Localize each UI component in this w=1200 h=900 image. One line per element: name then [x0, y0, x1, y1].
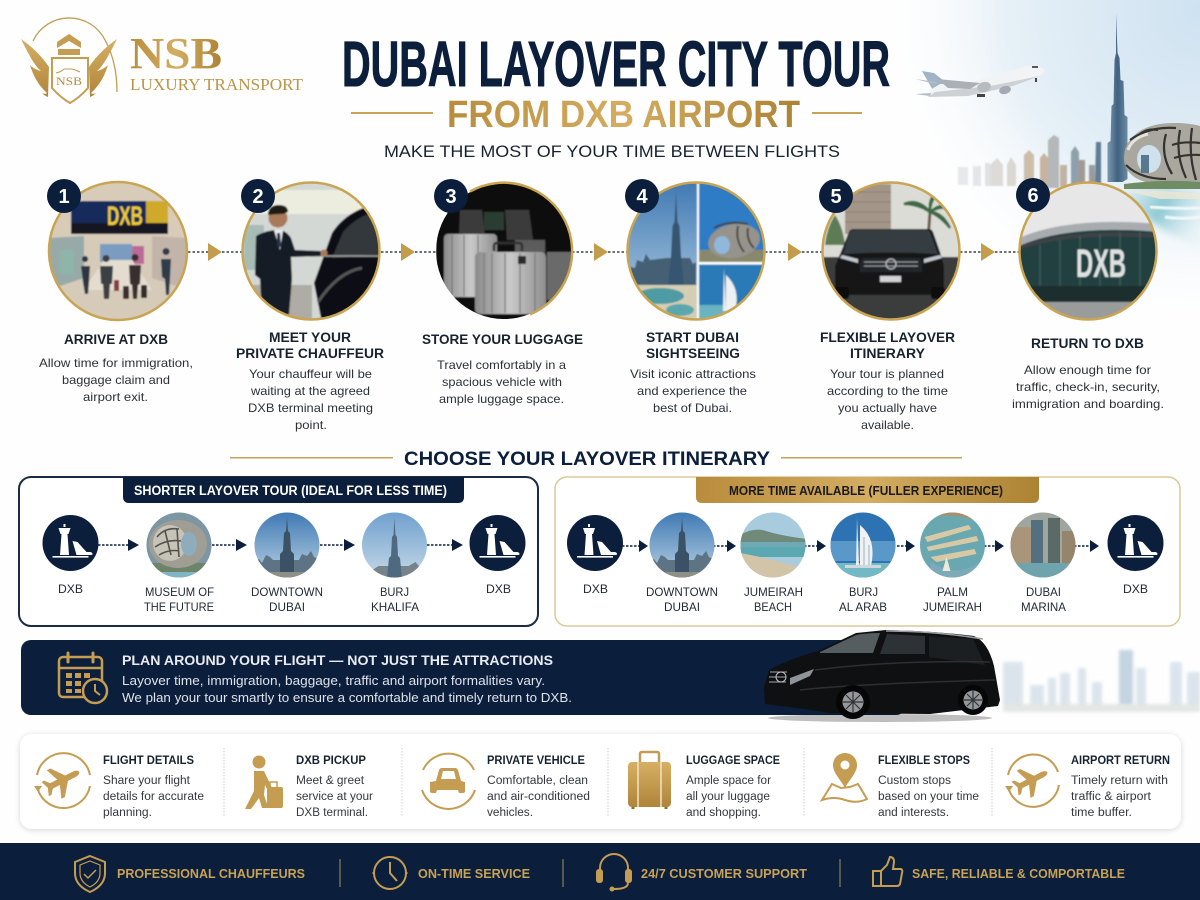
number badge 4: 4 [636, 186, 648, 208]
panel: more time available [555, 477, 1180, 626]
icon: map pin on map [822, 753, 867, 802]
footer item: professional chauffeurs [75, 856, 305, 892]
number badge 2: 2 [252, 186, 264, 208]
step 3 text: spacious vehicle with [442, 375, 562, 389]
photo: airport arrivals hall: DXB [107, 201, 143, 231]
step 2 text: Your chauffeur will be [249, 367, 372, 381]
stop: Jumeirah Beach: BEACH [754, 600, 792, 614]
stop: Burj Al Arab [830, 512, 896, 614]
feature: flexible stops: Custom stops [878, 775, 951, 787]
icon: calendar with clock [59, 653, 107, 703]
step 3 text [422, 332, 583, 406]
number badge 5 [819, 179, 853, 213]
tab: shorter layover heading [123, 477, 464, 503]
step 1 text: Allow time for immigration, [39, 356, 193, 370]
feature: private vehicle: PRIVATE VEHICLE [487, 753, 585, 767]
step 4 text: Visit iconic attractions [630, 367, 756, 381]
stop: Museum of the Future: THE FUTURE [144, 600, 214, 614]
banner text [122, 674, 572, 705]
step 3 text: STORE YOUR LUGGAGE [422, 332, 583, 347]
logo wordmark: NSB [130, 29, 222, 78]
stop: Downtown Dubai [646, 512, 718, 614]
step 2 text: PRIVATE CHAUFFEUR [236, 346, 384, 361]
step 1 text [39, 332, 193, 404]
step connectors [188, 243, 1019, 261]
stop: Burj Al Arab: AL ARAB [839, 600, 887, 614]
logo crest: NSB [56, 74, 82, 88]
banner text: Layover time, immigration, baggage, traffic and airport formalities vary. [122, 674, 545, 688]
icon: headset [596, 854, 632, 892]
feature: DXB pickup [245, 753, 373, 819]
step 2 text: DXB terminal meeting [248, 401, 373, 415]
photo: chauffeur opening car door [242, 181, 382, 323]
stop: DXB [567, 515, 623, 596]
number badge 6 [1016, 178, 1050, 212]
step 4 text: START DUBAI [646, 330, 739, 345]
feature: flight details: details for accurate [103, 791, 204, 803]
banner heading: PLAN AROUND YOUR FLIGHT — NOT JUST THE ATTRACTIONS [122, 653, 553, 668]
stop: Dubai Marina: DUBAI [1026, 585, 1061, 599]
title [342, 28, 890, 136]
icon: plane in ring [34, 753, 90, 808]
stop: DXB return: DXB [486, 582, 511, 596]
number badge 6: 6 [1027, 185, 1039, 207]
feature: flight details [34, 753, 204, 819]
icon: plane with return ring [1005, 754, 1059, 807]
photo: DXB terminal building [1019, 181, 1159, 322]
step 6 text: traffic, check-in, security, [1016, 380, 1160, 394]
icon: porter with suitcase [245, 756, 283, 809]
tab: fuller experience heading [696, 477, 1039, 503]
feature: luggage space [628, 752, 780, 819]
stop: Palm Jumeirah: JUMEIRAH [923, 600, 982, 614]
feature card row [20, 734, 1181, 829]
number badge 3: 3 [445, 186, 457, 208]
feature: flexible stops: and interests. [878, 807, 949, 819]
hero scenery: sky, skyline, Burj Khalifa, Museum of the Future [870, 0, 1200, 330]
stop: Dubai Marina [1010, 512, 1076, 614]
tab: fuller experience heading: MORE TIME AVAILABLE (FULLER EXPERIENCE) [729, 484, 1003, 498]
stop: Burj Khalifa: KHALIFA [371, 600, 419, 614]
stop: Downtown Dubai: DOWNTOWN [251, 585, 323, 599]
stop: Dubai Marina: MARINA [1021, 600, 1066, 614]
stop: Burj Al Arab: BURJ [849, 585, 878, 599]
icon: shield [75, 856, 105, 892]
number badge 4 [625, 179, 659, 213]
step 2 text: point. [295, 418, 327, 432]
step 2 text: waiting at the agreed [250, 384, 370, 398]
feature: airport return: time buffer. [1071, 807, 1132, 819]
step 5: flexible layover itinerary [819, 179, 962, 432]
feature: flexible stops [822, 753, 979, 819]
logo crest [21, 18, 117, 103]
icon: suitcase [628, 752, 671, 809]
photo: Dubai attractions collage [627, 181, 765, 321]
feature: DXB pickup: service at your [296, 791, 373, 803]
subtitle: MAKE THE MOST OF YOUR TIME BETWEEN FLIGHTS [384, 143, 840, 161]
tab: shorter layover heading: SHORTER LAYOVER TOUR (IDEAL FOR LESS TIME) [134, 483, 447, 498]
stop: Burj Khalifa [362, 512, 428, 614]
stop: Downtown Dubai: DUBAI [664, 600, 700, 614]
stop: DXB return [1108, 515, 1164, 596]
step 5 text: ITINERARY [850, 346, 925, 361]
feature: private vehicle: Comfortable, clean [487, 775, 588, 787]
feature: private vehicle: vehicles. [487, 807, 533, 819]
number badge 2 [241, 179, 275, 213]
feature: flexible stops: FLEXIBLE STOPS [878, 753, 970, 767]
stop: DXB: DXB [583, 582, 608, 596]
step 4 text: best of Dubai. [653, 401, 732, 415]
feature: airport return [1005, 753, 1170, 819]
title: FROM DXB AIRPORT [447, 94, 800, 136]
stop: DXB return [470, 515, 526, 596]
feature: airport return: AIRPORT RETURN [1071, 753, 1170, 767]
pale city skyline [1003, 650, 1200, 712]
footer item: professional chauffeurs: PROFESSIONAL CHAUFFEURS [117, 867, 305, 881]
title: DUBAI LAYOVER CITY TOUR [342, 28, 890, 100]
section heading: choose your layover itinerary: CHOOSE YOUR LAYOVER ITINERARY [404, 449, 770, 470]
step 3 text: ample luggage space. [439, 392, 564, 406]
feature: airport return: Timely return with [1071, 775, 1168, 787]
footer item: customer support: 24/7 CUSTOMER SUPPORT [641, 867, 807, 881]
feature: airport return: traffic & airport [1071, 791, 1152, 803]
stop: Museum of the Future [144, 512, 214, 614]
feature: private vehicle: and air-conditioned [487, 791, 590, 803]
step 1 text: ARRIVE AT DXB [64, 332, 168, 347]
banner text: We plan your tour smartly to ensure a comfortable and timely return to DXB. [122, 691, 572, 705]
stop: Palm Jumeirah [920, 512, 986, 614]
step 4 text [630, 330, 756, 415]
step 4: start Dubai sightseeing [625, 179, 765, 415]
feature: private vehicle [422, 753, 590, 819]
number badge 3 [434, 179, 468, 213]
step 5 text: Your tour is planned [830, 367, 944, 381]
feature: flight details: Share your flight [103, 775, 191, 787]
step 5 text: you actually have [838, 401, 937, 415]
step 5 text: available. [861, 418, 914, 432]
stop: DXB [42, 515, 98, 596]
step 5 text [820, 330, 955, 432]
black luxury van [764, 630, 1000, 722]
stop: Museum of the Future: MUSEUM OF [145, 585, 214, 599]
footer item: on-time service: ON-TIME SERVICE [418, 867, 530, 881]
step 2 text: MEET YOUR [269, 330, 351, 345]
step 6 text [1012, 336, 1164, 411]
stop: Jumeirah Beach: JUMEIRAH [744, 585, 803, 599]
stop: Downtown Dubai: DUBAI [269, 600, 305, 614]
step 6 text: immigration and boarding. [1012, 397, 1164, 411]
footer item: safe, reliable and comfortable: SAFE, RELIABLE & COMPORTABLE [912, 867, 1125, 881]
step 3: store your luggage [422, 179, 583, 406]
feature: DXB pickup: Meet & greet [296, 775, 365, 787]
step 3 text: Travel comfortably in a [437, 358, 566, 372]
feature: luggage space: and shopping. [686, 807, 761, 819]
stop: Palm Jumeirah: PALM [937, 585, 968, 599]
number badge 1: 1 [58, 186, 70, 208]
step 1 text: airport exit. [83, 390, 148, 404]
step 6 text: Allow enough time for [1024, 363, 1151, 377]
step 1: arrive at DXB [39, 179, 193, 404]
step 4 text: SIGHTSEEING [646, 346, 740, 361]
footer item: on-time service [372, 857, 530, 889]
photo: black SUV on Dubai street [822, 181, 962, 322]
Burj Khalifa [1108, 13, 1128, 182]
stop: DXB: DXB [58, 582, 83, 596]
footer item: customer support [596, 854, 807, 892]
feature: DXB pickup: DXB PICKUP [296, 753, 366, 767]
step 1 text: baggage claim and [62, 373, 170, 387]
photo: DXB terminal building: DXB [1076, 242, 1126, 286]
route connectors [622, 540, 1099, 552]
logo tagline: LUXURY TRANSPORT [130, 75, 304, 94]
step 6: return to DXB [1012, 178, 1164, 411]
icon: thumbs up [873, 857, 902, 886]
photo: luggage in the vehicle [436, 181, 576, 321]
photo: airport arrivals hall [48, 181, 188, 322]
feature: DXB pickup: DXB terminal. [296, 807, 368, 819]
logo: NSB Luxury Transport [21, 18, 304, 103]
stop: Jumeirah Beach [740, 512, 806, 614]
feature: flexible stops: based on your time [878, 791, 979, 803]
feature: flight details: planning. [103, 807, 152, 819]
icon: car in ring [422, 754, 475, 809]
number badge 1 [47, 179, 81, 213]
banner: plan around your flight [21, 640, 906, 715]
step 5 text: FLEXIBLE LAYOVER [820, 330, 955, 345]
stop: Downtown Dubai: DOWNTOWN [646, 585, 718, 599]
feature: luggage space: all your luggage [686, 791, 770, 803]
step 2 text [236, 330, 384, 432]
step 5 text: according to the time [827, 384, 948, 398]
footer bar [0, 843, 1200, 900]
Museum of the Future [1124, 123, 1200, 185]
feature: luggage space: LUGGAGE SPACE [686, 753, 780, 767]
step 2: meet your private chauffeur [236, 179, 384, 432]
route connectors [98, 539, 463, 551]
feature: flight details: FLIGHT DETAILS [103, 753, 194, 767]
panel: shorter layover tour [19, 477, 538, 626]
stop: Downtown Dubai [251, 512, 323, 614]
number badge 5: 5 [830, 186, 842, 208]
step 6 text: RETURN TO DXB [1031, 336, 1144, 351]
stop: Burj Khalifa: BURJ [380, 585, 409, 599]
feature: luggage space: Ample space for [686, 775, 771, 787]
stop: DXB return: DXB [1123, 582, 1148, 596]
icon: clock [372, 857, 408, 889]
step 4 text: and experience the [637, 384, 747, 398]
airplane [915, 66, 1045, 97]
footer item: safe, reliable and comfortable [873, 857, 1125, 886]
